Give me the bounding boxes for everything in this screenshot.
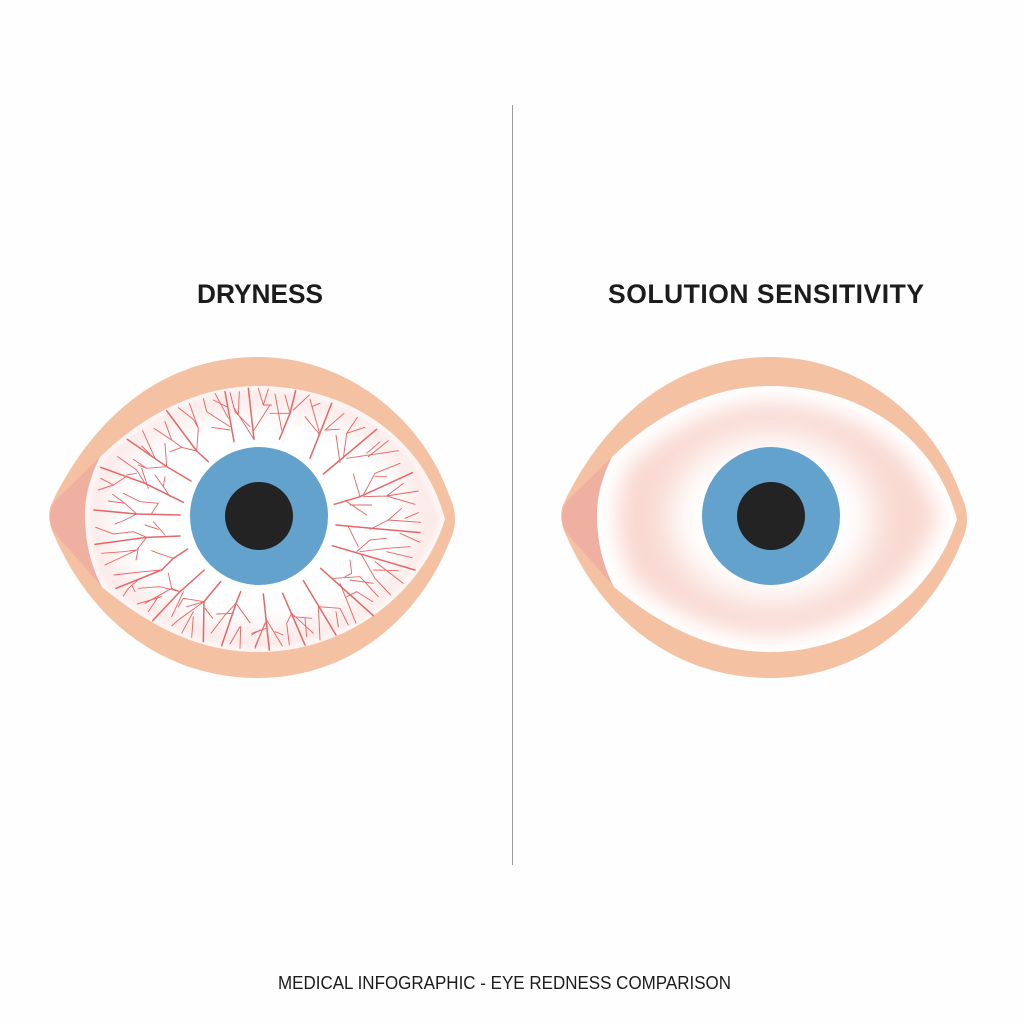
sclera with faint redness — [85, 386, 445, 652]
blood vessels: right half — [252, 388, 421, 650]
pupil — [225, 482, 293, 550]
eyelid skin — [561, 357, 967, 678]
pupil — [737, 482, 805, 550]
iris — [702, 447, 840, 585]
blood vessels: left half — [94, 388, 270, 648]
eye: solution sensitivity with diffuse redness — [561, 357, 967, 678]
caption: MEDICAL INFOGRAPHIC - EYE REDNESS COMPARISON — [278, 972, 731, 993]
panel divider line — [512, 105, 513, 865]
heading: dryness: DRYNESS — [197, 279, 323, 309]
sclera with diffuse pink ring — [590, 380, 965, 660]
eyelid skin — [49, 357, 455, 678]
heading: solution sensitivity: SOLUTION SENSITIVITY — [608, 279, 924, 309]
caruncle: inner corner — [50, 457, 128, 587]
caruncle: inner corner — [562, 457, 640, 587]
iris — [190, 447, 328, 585]
eye: dryness with branching vessels — [49, 357, 470, 678]
